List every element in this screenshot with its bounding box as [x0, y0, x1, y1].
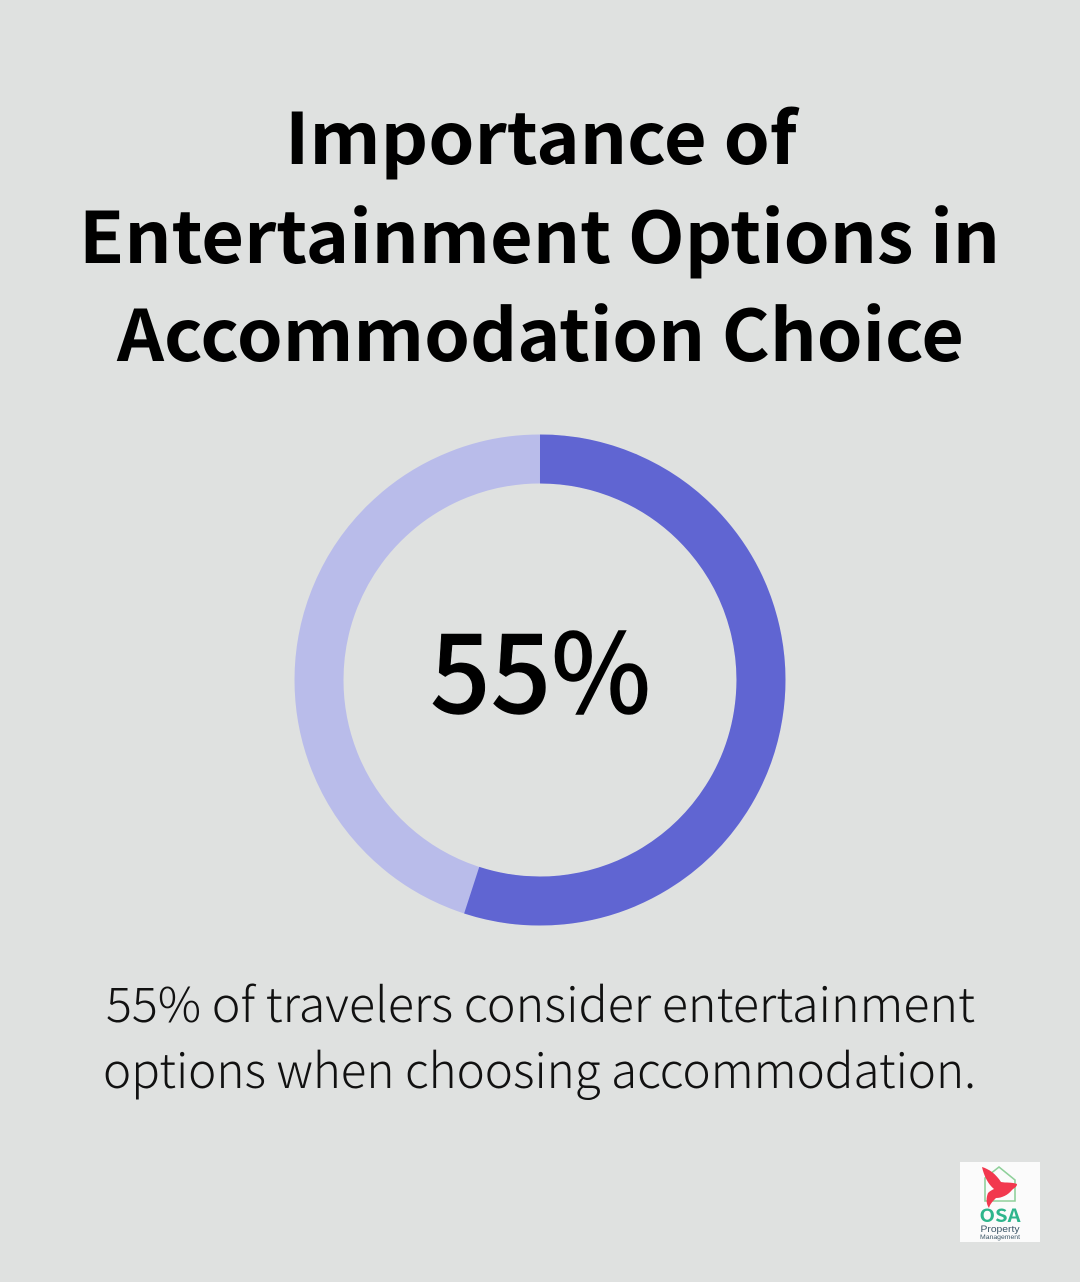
description text: 55% of travelers consider entertainment — [106, 966, 975, 1036]
icon: house outline — [985, 1167, 1015, 1201]
donut remainder — [319, 459, 761, 901]
logo small text: Management — [980, 1235, 1020, 1241]
logo background — [960, 1162, 1040, 1242]
logo subtitle: Property — [980, 1224, 1020, 1234]
donut centre value: 55% — [430, 585, 651, 745]
title: Accommodation Choice — [116, 280, 964, 382]
donut chart: 55% — [319, 459, 761, 901]
description text: options when choosing accommodation. — [103, 1032, 976, 1102]
title: Importance of — [285, 83, 800, 185]
logo: OSA Property Management — [960, 1162, 1040, 1242]
title — [79, 83, 1000, 382]
icon: red bird — [982, 1167, 1017, 1208]
donut value segment — [472, 459, 761, 901]
title: Entertainment Options in — [79, 182, 1000, 284]
description text — [103, 966, 976, 1102]
logo wordmark: OSA — [980, 1202, 1021, 1228]
